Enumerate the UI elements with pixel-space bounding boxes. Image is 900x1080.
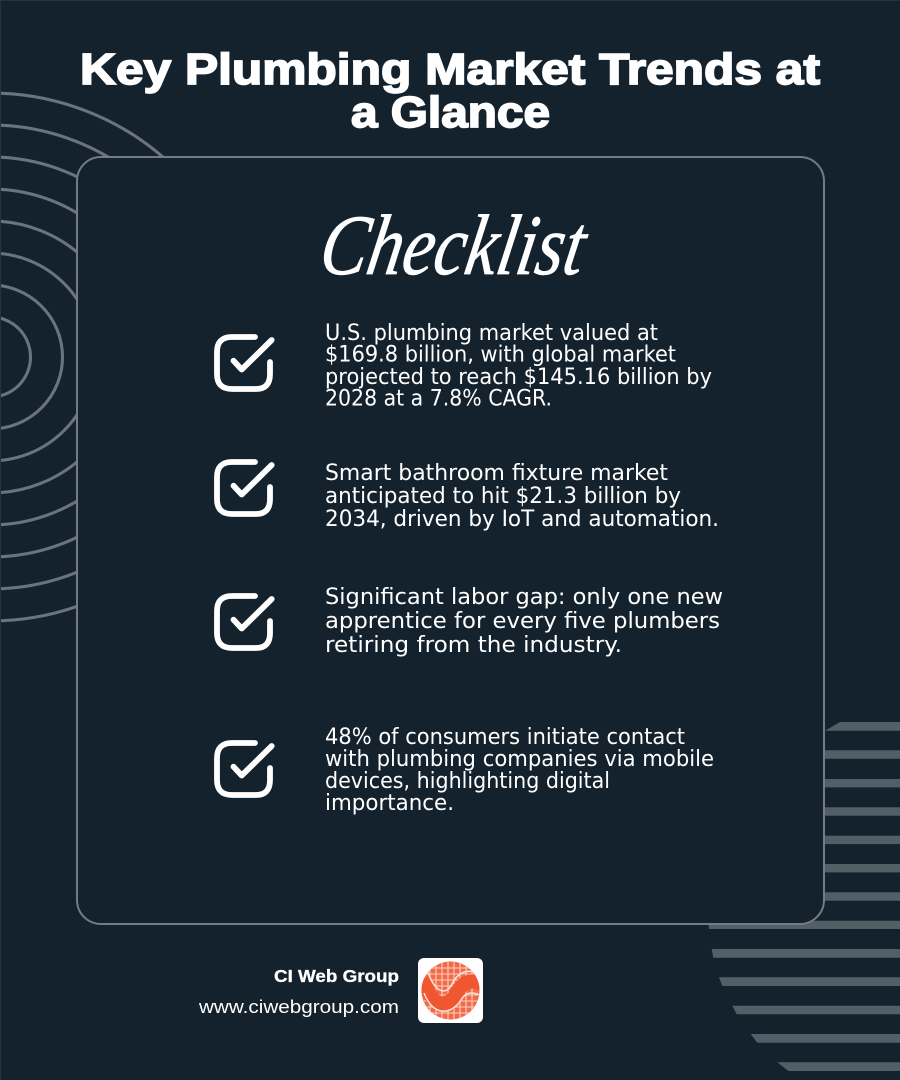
text block: market value: projected to reach $145.16 billion by bbox=[325, 364, 712, 390]
icon: company logo bbox=[418, 958, 483, 1023]
heading: Checklist: Checklist bbox=[314, 198, 595, 293]
text block: mobile contact: with plumbing companies via mobile bbox=[325, 746, 714, 772]
text block: labor gap: Significant labor gap: only one new bbox=[325, 584, 723, 610]
text block: smart fixtures bbox=[325, 460, 719, 532]
icon: checkbox 1 bbox=[217, 337, 272, 389]
text block: mobile contact: 48% of consumers initiate contact bbox=[325, 724, 685, 750]
text block: mobile contact bbox=[325, 724, 714, 816]
title: Key Plumbing Market Trends at bbox=[80, 45, 820, 94]
decorative stripes bbox=[708, 722, 900, 1071]
text block: smart fixtures: anticipated to hit $21.3 billion by bbox=[325, 483, 681, 509]
text block: smart fixtures: 2034, driven by IoT and automation. bbox=[325, 506, 719, 532]
text block: mobile contact: devices, highlighting digital bbox=[325, 768, 610, 794]
text block: market value: U.S. plumbing market valued at bbox=[325, 320, 658, 346]
panel: checklist card bbox=[77, 157, 824, 924]
text block: smart fixtures: Smart bathroom fixture market bbox=[325, 460, 668, 486]
icon: checkbox 2 bbox=[217, 462, 272, 514]
text block: labor gap: retiring from the industry. bbox=[325, 632, 622, 658]
text block: market value: $169.8 billion, with global market bbox=[325, 342, 676, 368]
footer: company name: CI Web Group bbox=[274, 966, 399, 986]
text block: market value bbox=[325, 320, 712, 412]
title: a Glance bbox=[351, 88, 550, 137]
text block: labor gap bbox=[325, 584, 723, 658]
title bbox=[80, 45, 820, 137]
text block: mobile contact: importance. bbox=[325, 790, 454, 816]
text block: labor gap: apprentice for every five plumbers bbox=[325, 608, 720, 634]
footer: website: www.ciwebgroup.com bbox=[198, 997, 399, 1017]
text block: market value: 2028 at a 7.8% CAGR. bbox=[325, 386, 552, 412]
icon: checkbox 3 bbox=[217, 596, 272, 648]
icon: checkbox 4 bbox=[217, 743, 272, 795]
decorative concentric arcs bbox=[0, 93, 254, 621]
